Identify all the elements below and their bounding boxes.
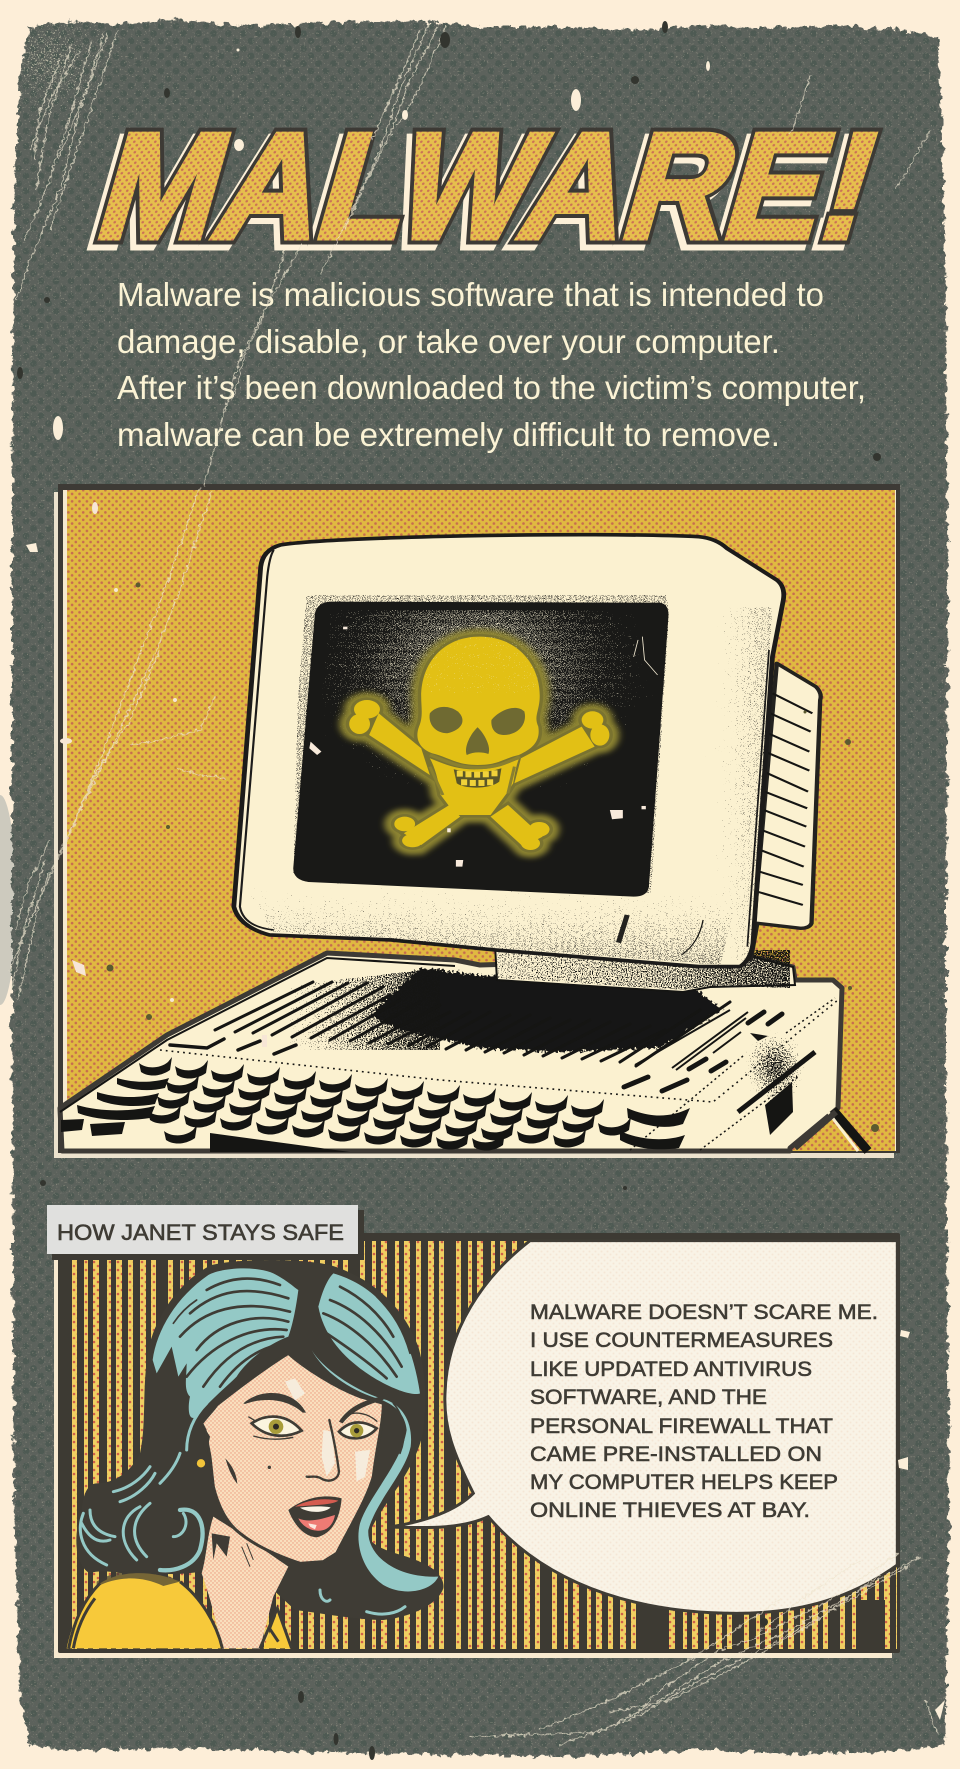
- caption label: How Janet Stays Safe: [47, 1205, 364, 1260]
- title shadow: MALWARE!: [76, 108, 892, 276]
- monitor stand: [495, 945, 795, 992]
- intro paragraph: Malware is malicious software that is intended to: [117, 276, 824, 313]
- rear vent module: [751, 663, 821, 960]
- panel: computer illustration: [54, 484, 900, 1158]
- hair blue highlights: [153, 1268, 438, 1591]
- eyebrows: [243, 1393, 306, 1413]
- title: MALWARE!: [76, 102, 898, 276]
- keyboard foot: [833, 1110, 868, 1151]
- neck: [202, 1517, 288, 1648]
- intro paragraph: [117, 276, 866, 453]
- power switch: [619, 915, 627, 943]
- skull eyes and nose: [430, 707, 462, 733]
- cheek mark and beauty spot: [225, 1458, 237, 1484]
- speech bubble text: CAME PRE-INSTALLED ON: [530, 1443, 822, 1466]
- hair dark streaks: [173, 1279, 410, 1453]
- shoulders: yellow top: [67, 1570, 292, 1648]
- speech bubble text: MY COMPUTER HELPS KEEP: [530, 1471, 838, 1494]
- mouth: [288, 1496, 342, 1537]
- speech bubble text: ONLINE THIEVES AT BAY.: [530, 1499, 810, 1522]
- icon: glowing skull and crossbones: [349, 637, 609, 850]
- monitor case: [234, 535, 784, 967]
- bezel stipple: [241, 877, 738, 965]
- speech bubble text: [530, 1301, 878, 1522]
- title fill: MALWARE!: [82, 102, 898, 270]
- keys: [61, 1057, 690, 1152]
- hair silhouette: [76, 1260, 444, 1620]
- small keyboard marks: [170, 1039, 296, 1054]
- title outline: MALWARE!: [82, 102, 898, 270]
- nose: [307, 1420, 339, 1481]
- screen: [293, 595, 669, 897]
- screen chips: [309, 627, 646, 867]
- keyboard: [60, 953, 868, 1152]
- speech bubble text: MALWARE DOESN’T SCARE ME.: [530, 1301, 878, 1324]
- face highlights: [285, 1378, 370, 1482]
- Janet portrait: [67, 1260, 444, 1648]
- speech bubble text: LIKE UPDATED ANTIVIRUS: [530, 1358, 812, 1381]
- speech bubble text: PERSONAL FIREWALL THAT: [530, 1415, 833, 1438]
- intro paragraph: malware can be extremely difficult to remove.: [117, 416, 780, 453]
- skull teeth: [454, 768, 501, 788]
- speech bubble text: I USE COUNTERMEASURES: [530, 1329, 833, 1352]
- caption label: How Janet Stays Safe: HOW JANET STAYS SAFE: [57, 1220, 344, 1245]
- striped halftone background: [66, 1241, 897, 1650]
- earring: [196, 1459, 206, 1468]
- speech bubble: [389, 1241, 897, 1613]
- panel 1 specks: [60, 502, 879, 1132]
- panel: Janet with speech bubble: [47, 1205, 900, 1658]
- vent slots: [215, 982, 730, 1066]
- keyboard side details: [765, 1082, 793, 1135]
- eyes: [248, 1413, 377, 1439]
- face: [202, 1353, 383, 1563]
- shadow under monitor: [370, 968, 722, 1052]
- monitor: [234, 535, 821, 967]
- intro paragraph: After it’s been downloaded to the victim’s computer,: [117, 369, 866, 406]
- intro paragraph: damage, disable, or take over your computer.: [117, 323, 780, 360]
- speech bubble text: SOFTWARE, AND THE: [530, 1386, 767, 1409]
- dotted seam: [160, 1000, 838, 1102]
